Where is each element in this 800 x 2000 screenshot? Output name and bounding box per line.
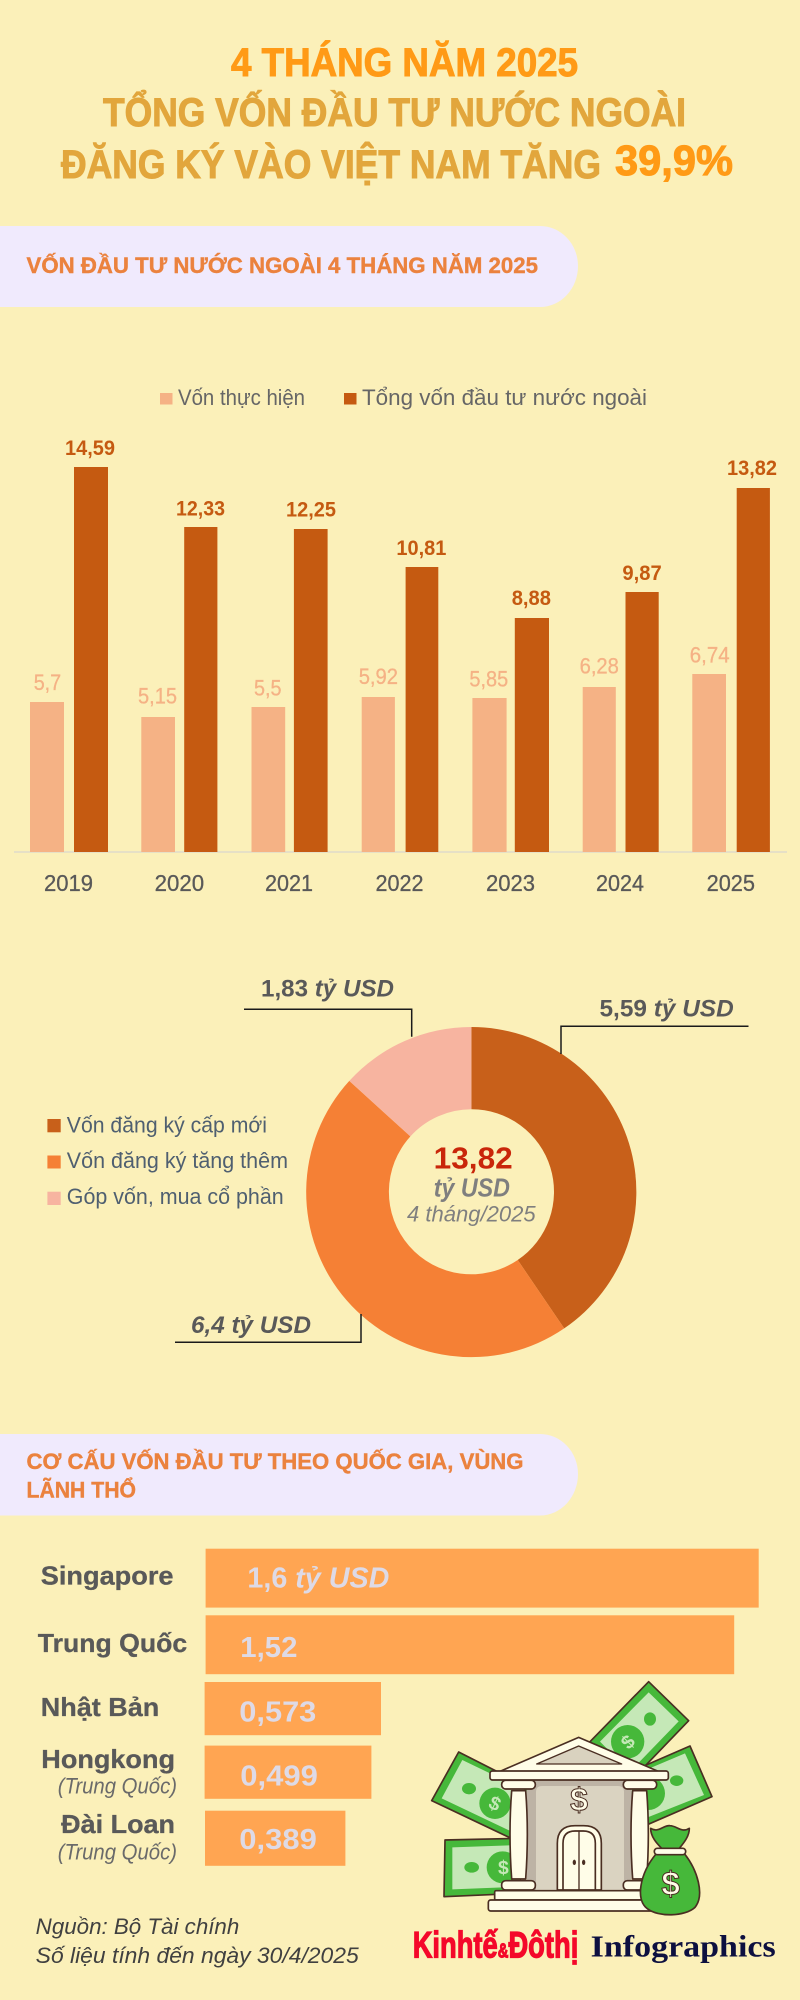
bars: 2019 bbox=[30, 437, 115, 896]
country bars bbox=[38, 1549, 759, 1866]
icon: bank with money bbox=[432, 1682, 712, 1915]
donut legend: Góp vốn, mua cổ phần bbox=[67, 1184, 284, 1209]
callout: 1,83 bbox=[244, 976, 412, 1037]
bars: 2025: 2025 bbox=[707, 870, 755, 896]
logo: Kinh tế & Đô thị Infographics: Infographics bbox=[591, 1929, 776, 1964]
donut centre total bbox=[407, 1140, 536, 1227]
icon: top banknote: $ bbox=[617, 1731, 640, 1754]
callout: 5,59 bbox=[561, 996, 748, 1054]
bars: 2020 bbox=[138, 497, 225, 896]
icon: bank building: $ bbox=[570, 1782, 588, 1818]
bars: 2025: 6,74 bbox=[690, 643, 730, 668]
row: Singapore: Singapore bbox=[41, 1561, 173, 1591]
icon: money bag: $ bbox=[661, 1866, 680, 1903]
title: 39,9% bbox=[615, 137, 733, 185]
section heading: foreign investment 4 months bbox=[0, 226, 578, 307]
bars: 2021: 12,25 bbox=[286, 499, 336, 522]
bars: 2020: 12,33 bbox=[176, 497, 225, 520]
bars: 2021 bbox=[252, 499, 336, 896]
row: Trung Quốc: Trung Quốc bbox=[38, 1628, 187, 1658]
donut legend bbox=[47, 1112, 288, 1209]
bars: 2024: 6,28 bbox=[580, 653, 619, 678]
row: Singapore: 1,6 tỷ USD bbox=[247, 1563, 389, 1595]
row: Trung Quốc: 1,52 bbox=[240, 1632, 297, 1664]
bars: 2022: 2022 bbox=[376, 870, 424, 896]
section heading: by country: LÃNH THỔ bbox=[26, 1478, 136, 1503]
bars: 2020: 2020 bbox=[155, 870, 204, 896]
row: Đài Loan bbox=[58, 1809, 345, 1866]
segment: capital contribution 1,83 bbox=[349, 1027, 471, 1136]
segment: additional 6,4 bbox=[306, 1081, 564, 1357]
bars: 2022: 5,92 bbox=[359, 664, 398, 689]
row: Nhật Bản bbox=[41, 1682, 381, 1735]
icon: top banknote bbox=[590, 1682, 689, 1782]
donut legend: Vốn đăng ký tăng thêm bbox=[67, 1148, 288, 1173]
bars: 2025 bbox=[690, 457, 777, 896]
bars: 2019: 14,59 bbox=[65, 437, 115, 460]
bar chart legend bbox=[160, 385, 647, 410]
bars: 2023: 5,85 bbox=[469, 667, 508, 692]
bars: 2024: 9,87 bbox=[622, 562, 662, 585]
bars: 2023: 8,88 bbox=[512, 587, 551, 610]
icon: bank building bbox=[488, 1737, 668, 1911]
bars: 2024: 2024 bbox=[596, 870, 644, 896]
bars: 2020: 5,15 bbox=[138, 683, 177, 708]
row: Đài Loan: (Trung Quốc) bbox=[58, 1840, 177, 1864]
title: 4 THÁNG NĂM 2025 bbox=[231, 40, 578, 85]
title bbox=[61, 40, 733, 187]
donut centre total: 4 tháng/2025 bbox=[407, 1202, 536, 1227]
callout: 6,4 bbox=[175, 1312, 361, 1342]
bars: 2023 bbox=[469, 587, 551, 896]
bars: 2024 bbox=[580, 562, 662, 896]
icon: left banknote bbox=[432, 1752, 540, 1839]
bars: 2022: 10,81 bbox=[396, 537, 447, 560]
logo: Kinh tế & Đô thị Infographics: Kinhtế&Đôthị bbox=[413, 1924, 578, 1965]
bars: 2021: 2021 bbox=[265, 870, 313, 896]
bar chart legend: Tổng vốn đầu tư nước ngoài bbox=[362, 385, 647, 410]
section heading: by country: CƠ CẤU VỐN ĐẦU TƯ THEO QUỐC GIA, VÙNG bbox=[26, 1448, 524, 1474]
bars: 2019: 5,7 bbox=[34, 670, 61, 695]
row: Đài Loan: 0,389 bbox=[239, 1824, 317, 1856]
bars: 2025: 13,82 bbox=[727, 457, 777, 480]
donut centre total: tỷ USD bbox=[434, 1173, 510, 1203]
bar chart legend: Vốn thực hiện bbox=[178, 385, 305, 410]
row: Hongkong: 0,499 bbox=[240, 1760, 318, 1792]
bars: 2023: 2023 bbox=[486, 870, 535, 896]
row: Nhật Bản: Nhật Bản bbox=[41, 1692, 159, 1722]
icon: bottom banknote bbox=[444, 1838, 520, 1897]
source note bbox=[36, 1914, 359, 1968]
title: TỔNG VỐN ĐẦU TƯ NƯỚC NGOÀI bbox=[103, 88, 686, 135]
donut chart: capital structure bbox=[306, 1027, 636, 1357]
row: Hongkong: Hongkong bbox=[41, 1744, 175, 1774]
donut legend: Vốn đăng ký cấp mới bbox=[67, 1112, 267, 1138]
callout: 1,83: 1,83 tỷ USD bbox=[261, 976, 394, 1003]
title: ĐĂNG KÝ VÀO VIỆT NAM TĂNG bbox=[61, 141, 601, 187]
icon: money bag bbox=[640, 1826, 700, 1915]
logo: Kinh tế & Đô thị Infographics bbox=[413, 1924, 776, 1965]
section heading: by country bbox=[0, 1434, 578, 1516]
row: Singapore bbox=[41, 1549, 759, 1608]
callout: 5,59: 5,59 tỷ USD bbox=[600, 996, 734, 1023]
icon: right banknote bbox=[604, 1746, 712, 1834]
source note: Số liệu tính đến ngày 30/4/2025 bbox=[36, 1943, 359, 1968]
bars: 2019: 2019 bbox=[44, 870, 93, 896]
section heading: foreign investment 4 months: VỐN ĐẦU TƯ NƯỚC NGOÀI 4 THÁNG NĂM 2025 bbox=[26, 252, 538, 278]
row: Hongkong: (Trung Quốc) bbox=[58, 1774, 177, 1799]
row: Đài Loan: Đài Loan bbox=[61, 1809, 175, 1839]
icon: left banknote: $ bbox=[485, 1793, 504, 1816]
bar chart: foreign investment 2019-2025 bbox=[14, 437, 787, 896]
row: Trung Quốc bbox=[38, 1615, 734, 1674]
segment: new registered 5,59 bbox=[471, 1027, 636, 1328]
source note: Nguồn: Bộ Tài chính bbox=[36, 1914, 239, 1939]
icon: bottom banknote: $ bbox=[498, 1858, 509, 1879]
row: Hongkong bbox=[41, 1744, 371, 1799]
bars: 2022 bbox=[359, 537, 447, 896]
callout: 6,4: 6,4 tỷ USD bbox=[191, 1312, 311, 1339]
bars: 2021: 5,5 bbox=[254, 676, 282, 701]
row: Nhật Bản: 0,573 bbox=[239, 1696, 316, 1728]
donut centre total: 13,82 bbox=[434, 1140, 513, 1175]
